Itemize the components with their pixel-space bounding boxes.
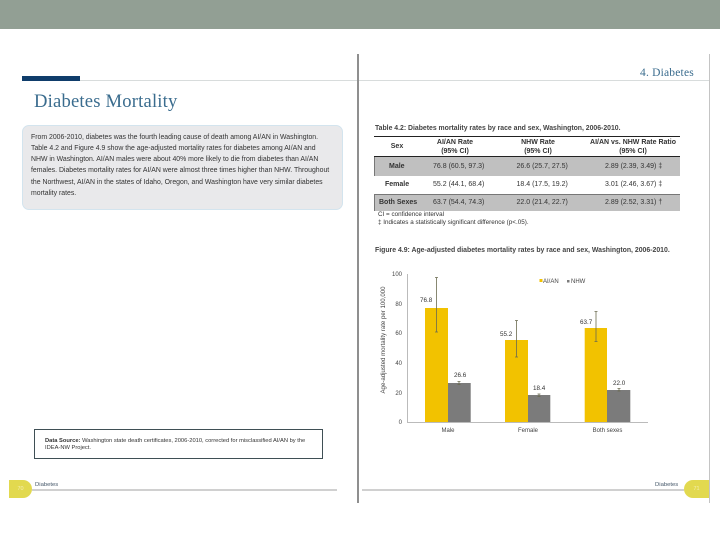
table top rule bbox=[374, 136, 680, 137]
x axis labels: Female bbox=[518, 428, 539, 434]
header: AI/AN rate: (95% CI) bbox=[441, 148, 469, 155]
row shading: male bbox=[374, 157, 680, 176]
error bars bbox=[435, 278, 620, 396]
bar chart bbox=[380, 272, 648, 434]
header accent bar bbox=[22, 76, 80, 81]
row: female: Female bbox=[385, 181, 409, 188]
table footnotes bbox=[378, 211, 529, 226]
value labels: 18.4 bbox=[533, 385, 546, 392]
header: NHW rate: NHW Rate bbox=[521, 139, 555, 146]
row: male: 26.6 (25.7, 27.5) bbox=[516, 163, 568, 170]
intro paragraph: the Northwest, AI/AN in the states of Idaho, Oregon, and Washington have very similar diabetes bbox=[31, 179, 323, 186]
row: male: 2.89 (2.39, 3.49) ‡ bbox=[605, 163, 662, 170]
x axis labels: Male bbox=[441, 428, 455, 434]
table footnotes: ‡ Indicates a statistically significant difference (p<.05). bbox=[378, 218, 529, 226]
figure title: Figure 4.9: Age-adjusted diabetes mortality rates by race and sex, Washington, 2006-2010. bbox=[375, 247, 670, 254]
row: both sexes: Both Sexes bbox=[379, 199, 417, 206]
header: AI/AN rate: AI/AN Rate bbox=[437, 139, 473, 146]
intro paragraph: Table 4.2 and Figure 4.9 show the age-adjusted mortality rates for diabetes among AI/AN and bbox=[31, 145, 316, 152]
header: sex: Sex bbox=[391, 143, 403, 150]
row: female bbox=[385, 180, 662, 188]
header: NHW rate bbox=[521, 139, 555, 155]
intro paragraph: From 2006-2010, diabetes was the fourth leading cause of death among AI/AN in Washington. bbox=[31, 134, 318, 140]
footer left: page tab bbox=[9, 480, 32, 498]
section label: 4. Diabetes: 4. Diabetes bbox=[640, 67, 694, 79]
footer right: page tab bbox=[684, 480, 709, 498]
footer left: label: Diabetes bbox=[35, 482, 58, 488]
table footnotes: CI = confidence interval bbox=[378, 211, 444, 218]
intro paragraph: NHW in Washington. AI/AN males were about 40% more likely to die from diabetes than AI/AN bbox=[31, 156, 318, 163]
y axis title: Age-adjusted mortality rate per 100,000 bbox=[380, 286, 387, 394]
y axis tick labels: 60 bbox=[395, 331, 403, 337]
data source text bbox=[45, 438, 305, 451]
page header rule bbox=[22, 80, 709, 81]
row: both sexes: 63.7 (54.4, 74.3) bbox=[433, 199, 484, 206]
legend: NHW bbox=[571, 279, 586, 285]
header: NHW rate: (95% CI) bbox=[524, 148, 552, 155]
row: female: 55.2 (44.1, 68.4) bbox=[433, 181, 484, 188]
intro paragraph: mortality rates. bbox=[31, 190, 76, 197]
footer left: page tab: 70 bbox=[17, 486, 24, 492]
value labels bbox=[420, 297, 626, 392]
heading: Diabetes Mortality: Diabetes Mortality bbox=[34, 91, 178, 112]
row: male: Male bbox=[389, 163, 405, 170]
footer right: page tab: 71 bbox=[693, 486, 700, 492]
row: male bbox=[389, 162, 662, 170]
table header rule bbox=[374, 156, 680, 157]
data source text: Data Source: Washington state death certificates, 2006-2010, corrected for misclassified AI/AN by the bbox=[45, 438, 305, 444]
data source box bbox=[34, 429, 323, 459]
y axis tick labels: 20 bbox=[395, 391, 403, 397]
table title: Table 4.2: Diabetes mortality rates by race and sex, Washington, 2006-2010. bbox=[375, 125, 621, 132]
y axis tick labels: 100 bbox=[392, 272, 403, 278]
data source text: IDEA-NW Project. bbox=[45, 445, 91, 451]
intro paragraph: females. Diabetes mortality rates for AI/AN were almost three times higher than NHW. Throughout bbox=[31, 167, 329, 174]
footer right: label: Diabetes bbox=[655, 482, 678, 488]
intro paragraph bbox=[31, 134, 330, 197]
row: both sexes: 22.0 (21.4, 22.7) bbox=[516, 199, 568, 206]
right page border bbox=[709, 54, 710, 503]
value labels: 55.2 bbox=[500, 331, 513, 338]
y axis tick labels: 40 bbox=[395, 361, 403, 367]
row: both sexes: 2.89 (2.52, 3.31) † bbox=[605, 199, 662, 206]
row: male: 76.8 (60.5, 97.3) bbox=[433, 163, 484, 170]
row: female: 18.4 (17.5, 19.2) bbox=[516, 181, 568, 188]
footer left: rule bbox=[32, 489, 337, 491]
page spine divider bbox=[357, 54, 359, 503]
panel: intro text bbox=[22, 125, 343, 210]
header: rate ratio: (95% CI) bbox=[619, 148, 647, 155]
value labels: 22.0 bbox=[613, 380, 626, 387]
top banner bbox=[0, 0, 720, 29]
footer right: rule bbox=[362, 489, 684, 491]
x axis labels: Both sexes bbox=[593, 428, 622, 434]
y axis tick labels: 80 bbox=[395, 302, 403, 308]
bars: female bbox=[505, 340, 550, 422]
header: AI/AN rate bbox=[437, 138, 473, 155]
value labels: 63.7 bbox=[580, 319, 593, 326]
axes bbox=[407, 274, 648, 422]
y axis tick labels: 0 bbox=[399, 420, 403, 426]
row: both sexes bbox=[379, 198, 662, 206]
legend: AI/AN bbox=[543, 279, 559, 285]
header: rate ratio bbox=[590, 138, 676, 155]
bars: both sexes bbox=[585, 328, 630, 422]
bars: male bbox=[425, 308, 471, 422]
value labels: 26.6 bbox=[454, 372, 467, 379]
table 4.2 bbox=[374, 136, 680, 211]
row: female: 3.01 (2.46, 3.67) ‡ bbox=[605, 181, 662, 188]
header: rate ratio: AI/AN vs. NHW Rate Ratio bbox=[590, 139, 676, 146]
y axis tick labels bbox=[392, 272, 403, 426]
value labels: 76.8 bbox=[420, 297, 433, 304]
x axis labels bbox=[441, 428, 622, 434]
legend bbox=[540, 279, 586, 285]
row shading: both sexes bbox=[374, 194, 680, 211]
